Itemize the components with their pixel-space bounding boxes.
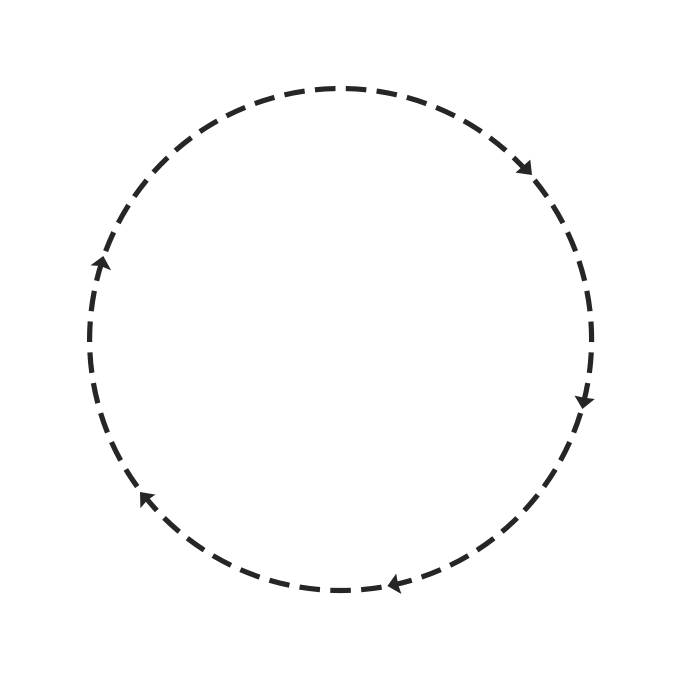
- arrow: bottom left: [140, 492, 156, 508]
- arrow: right: [574, 396, 595, 409]
- arrow: top right: [516, 160, 532, 175]
- arrow: bottom: [387, 574, 401, 594]
- arrow: left: [90, 256, 111, 270]
- dashed circle: [90, 88, 592, 590]
